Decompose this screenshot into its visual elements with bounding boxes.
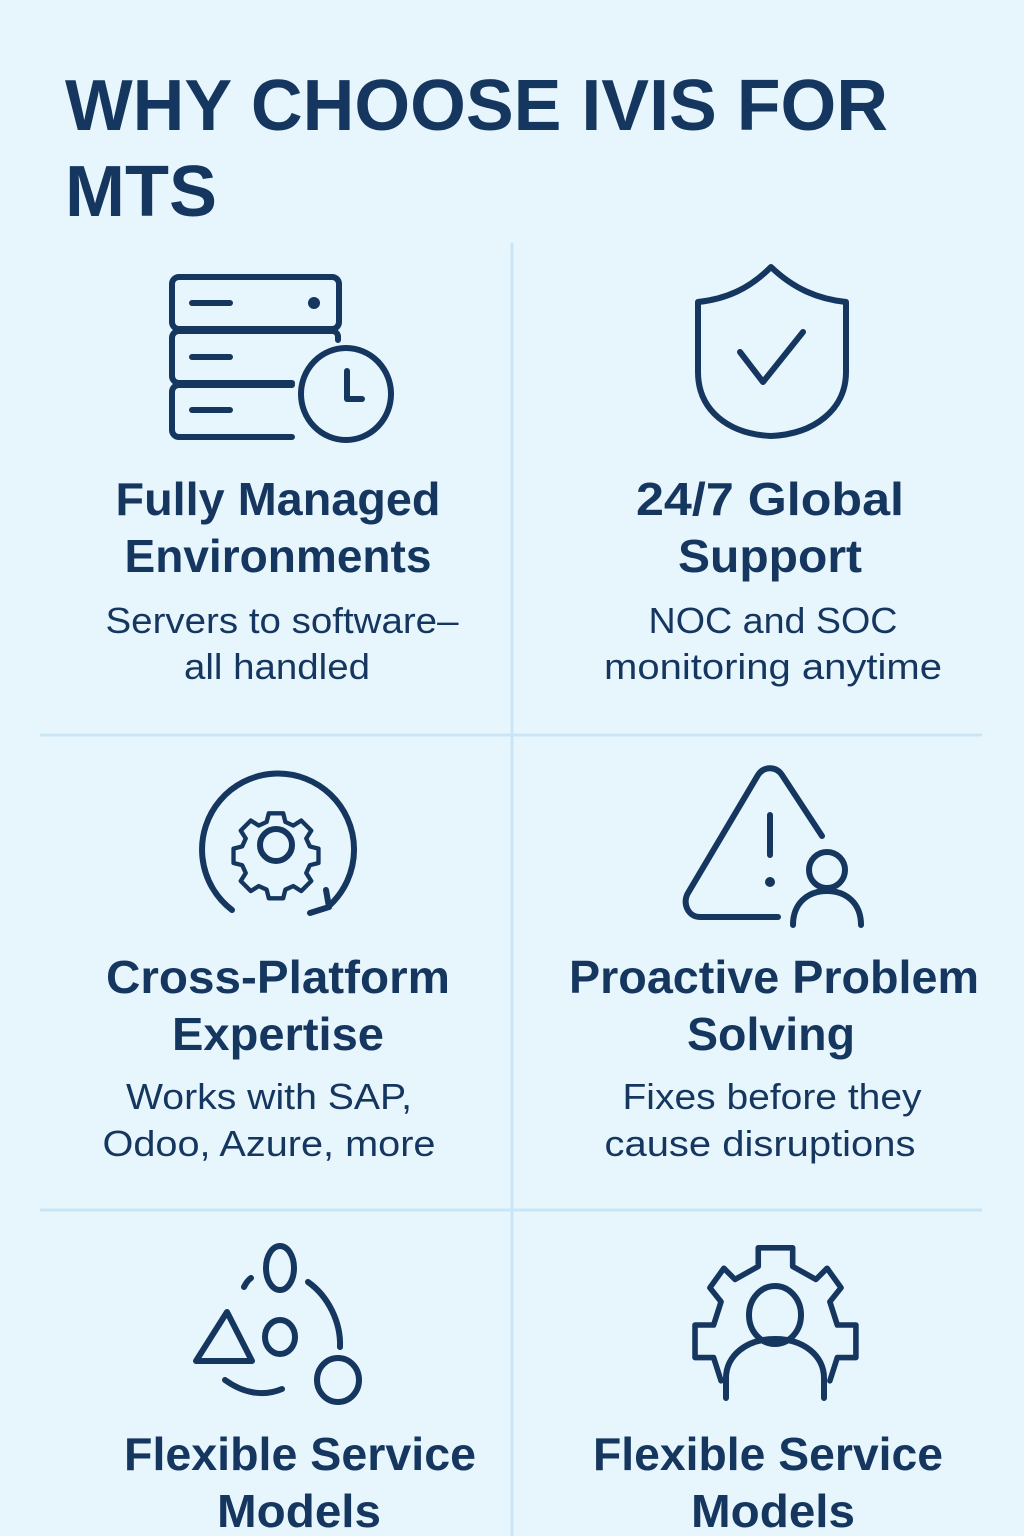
heading: Proactive Problem [569,951,979,1003]
panel: proactive problem solving [569,768,979,1164]
panel: cross-platform expertise [102,774,450,1164]
panel: cross-platform expertise: Expertise [172,1008,384,1060]
description: NOC and SOC [648,600,898,641]
description: Fixes before they [622,1076,922,1117]
panel: 24/7 global support: Support [678,530,862,582]
icon: shield check [698,267,846,436]
title [65,66,888,232]
icon: warning with person [686,768,861,925]
heading: Flexible Service [124,1428,476,1480]
panel: flexible service models (right): Models [691,1485,855,1536]
panel: flexible service models (right) [593,1248,943,1536]
heading: Cross-Platform [106,951,450,1003]
title: MTS [65,152,217,232]
panel: flexible service models (left) [124,1246,476,1536]
icon: server with clock [172,277,391,440]
panel: 24/7 global support: monitoring anytime [604,646,942,687]
heading: Fully Managed [116,473,440,525]
panel: fully managed environments: Environments [124,530,432,582]
heading: Flexible Service [593,1428,943,1480]
panel: proactive problem solving: Solving [687,1008,855,1060]
panel: 24/7 global support [604,267,942,687]
panel: fully managed environments [106,277,458,687]
heading: 24/7 Global [636,473,904,525]
description: Servers to software– [106,600,458,641]
panel: flexible service models (left): Models [217,1485,381,1536]
icon: shapes cycle [196,1246,359,1402]
icon: gear with person [695,1248,856,1398]
description: Works with SAP, [126,1076,412,1117]
icon: gear with cycle arrow [202,774,354,913]
panel: cross-platform expertise: Odoo, Azure, more [102,1123,436,1164]
panel: proactive problem solving: cause disruptions [604,1123,916,1164]
panel: fully managed environments: all handled [184,646,370,687]
title: WHY CHOOSE IVIS FOR [65,66,888,146]
